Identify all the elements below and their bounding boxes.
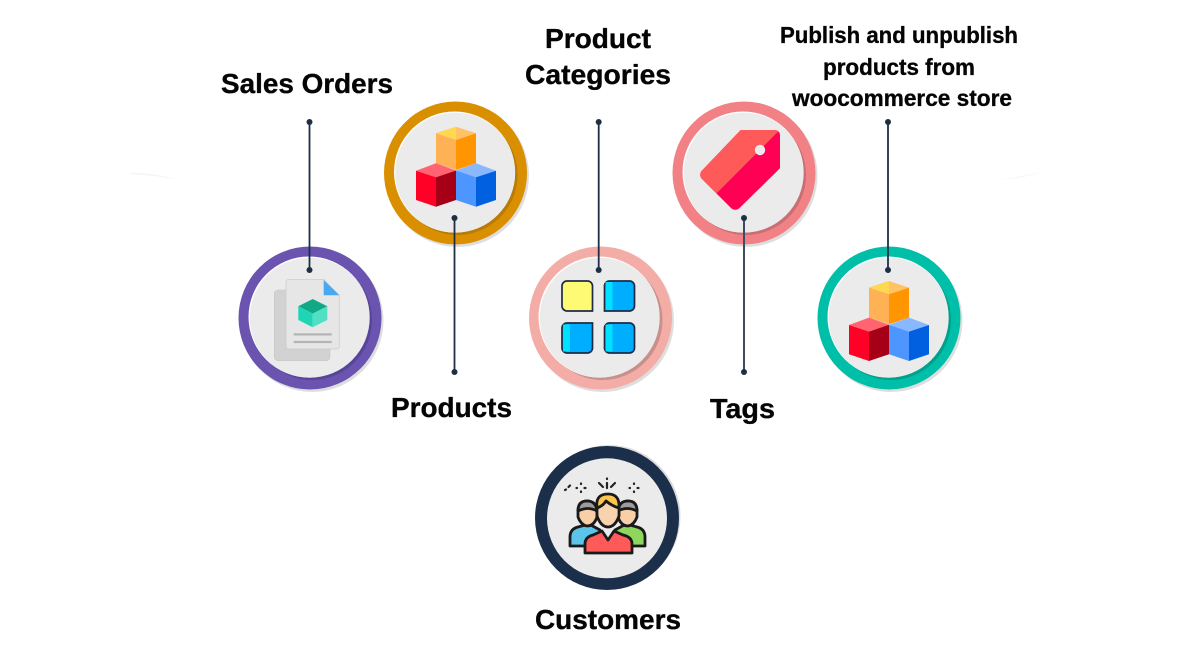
icon: price tag: [700, 130, 780, 210]
connector: products: [452, 215, 458, 375]
icon: document with cube: [274, 279, 339, 361]
faint mark left: [130, 173, 176, 179]
badge: pink ring: [529, 246, 674, 392]
connector: tags: [741, 215, 747, 375]
heading: products: Products: [391, 392, 512, 423]
heading: publish and unpublish: Publish and unpublish: [780, 22, 1018, 48]
heading: product categories: Product: [545, 23, 651, 54]
badge: teal ring: [818, 246, 962, 392]
badge: purple ring: [238, 246, 384, 392]
panel: tags: [672, 102, 818, 424]
badge: navy ring: [535, 445, 680, 590]
icon: category grid: [562, 281, 634, 353]
badge: coral ring: [672, 102, 818, 247]
panel: products: [384, 102, 529, 423]
heading: publish and unpublish: woocommerce store: [791, 85, 1012, 111]
icon: customers group: [570, 494, 645, 553]
heading: tags: Tags: [710, 393, 775, 424]
icon: sparkles: [565, 478, 638, 492]
heading: publish and unpublish: products from: [823, 54, 975, 80]
panel: customers: [535, 445, 681, 635]
badge: gold ring: [384, 102, 529, 247]
heading: sales orders: Sales Orders: [221, 68, 393, 99]
connector: sales orders: [306, 119, 312, 273]
heading: product categories: Categories: [525, 59, 671, 90]
panel: sales orders: [221, 68, 393, 392]
faint mark right: [1000, 172, 1042, 179]
connector: product categories: [596, 119, 602, 273]
icon: cubes: [416, 127, 496, 207]
panel: publish and unpublish: [780, 22, 1018, 392]
connector: publish: [885, 119, 891, 273]
panel: product categories: [525, 23, 674, 392]
heading: customers: Customers: [535, 604, 681, 635]
icon: cubes: [849, 281, 929, 361]
